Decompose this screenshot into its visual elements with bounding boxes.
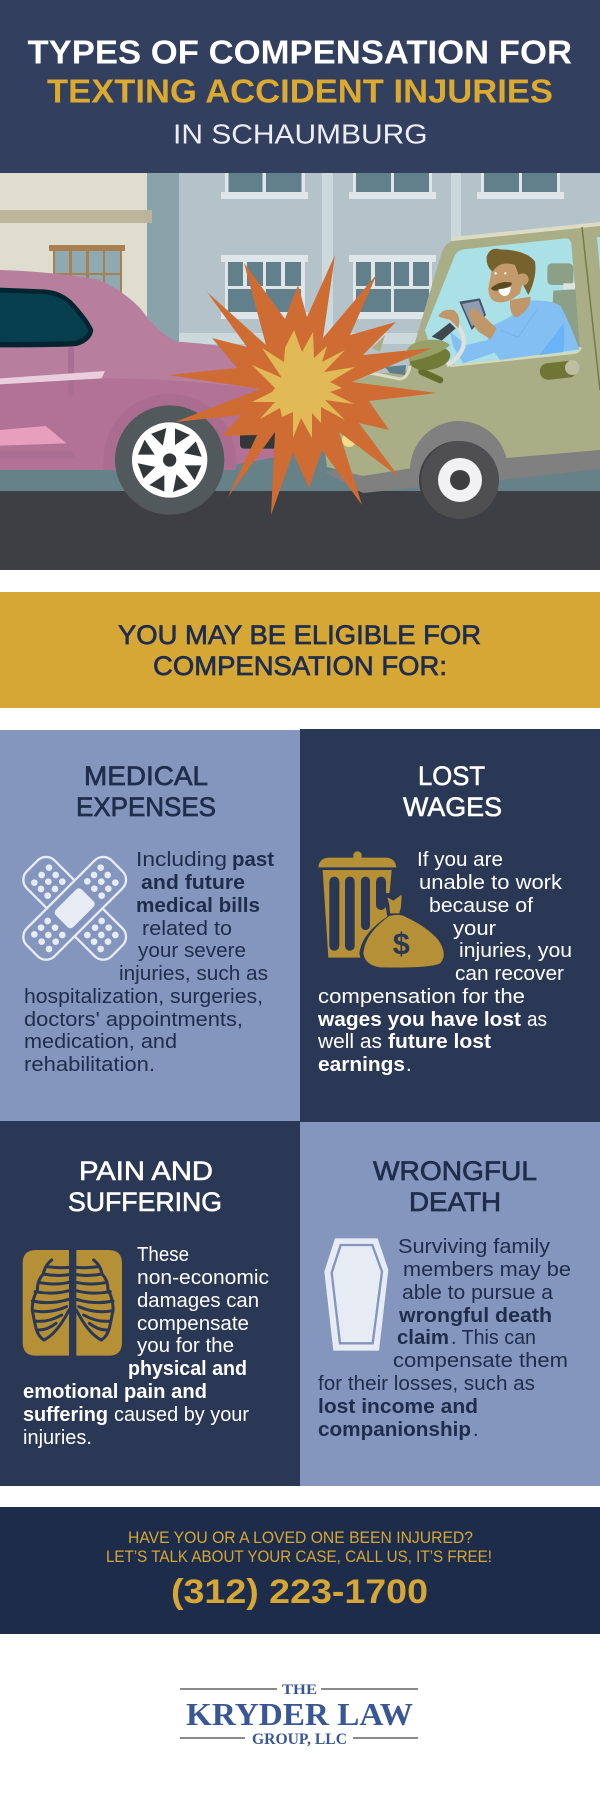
text: wrongful death body: Surviving family <box>398 1236 550 1258</box>
text: medical expenses body: Including <box>136 849 227 871</box>
icon: coffin <box>324 1238 388 1351</box>
text: lost wages body: future lost <box>388 1031 491 1053</box>
text: lost wages body: because of <box>429 895 533 917</box>
pink car <box>0 270 293 515</box>
text: medical expenses body: injuries, such as <box>119 963 268 985</box>
text: medical expenses body: medication, and <box>24 1031 177 1053</box>
heading: wrongful death <box>373 1156 537 1217</box>
text: medical expenses body: hospitalization, surgeries, <box>24 986 263 1008</box>
logo: The Kryder Law Group <box>180 1682 418 1748</box>
heading: lost wages: WAGES <box>403 792 502 822</box>
text: pain and suffering body: injuries. <box>23 1427 92 1449</box>
text: lost wages body: as <box>527 1009 547 1031</box>
icon: trash can and money bag <box>318 851 444 971</box>
heading: wrongful death: WRONGFUL <box>373 1156 537 1186</box>
logo: The Kryder Law Group: KRYDER LAW <box>186 1696 413 1732</box>
heading: pain and suffering: SUFFERING <box>68 1187 222 1217</box>
text: wrongful death body: wrongful death <box>398 1305 552 1327</box>
call to action text: HAVE YOU OR A LOVED ONE BEEN INJURED? <box>128 1529 473 1547</box>
icon: trash can and money bag: $ <box>393 927 410 961</box>
panel: lost wages <box>300 729 600 1122</box>
text: medical expenses body <box>24 849 274 1076</box>
logo: The Kryder Law Group: THE <box>282 1682 317 1698</box>
subtitle: IN SCHAUMBURG <box>173 119 428 150</box>
heading: medical expenses <box>76 761 216 822</box>
banner heading: YOU MAY BE ELIGIBLE FOR <box>118 620 481 650</box>
icon: rib cage <box>23 1250 122 1356</box>
text: medical expenses body: doctors' appointments, <box>24 1009 243 1031</box>
text: wrongful death body: members may be <box>403 1259 571 1281</box>
call to action text: LET’S TALK ABOUT YOUR CASE, CALL US, IT’S FREE! <box>106 1548 492 1566</box>
banner heading <box>118 620 481 681</box>
panel: pain and suffering <box>0 1121 300 1486</box>
text: lost wages body: injuries, you <box>459 940 572 962</box>
text: medical expenses body: and future <box>141 872 245 894</box>
text: medical expenses body: past <box>232 849 274 871</box>
text: lost wages body: wages you have lost <box>317 1009 521 1031</box>
heading: pain and suffering: PAIN AND <box>79 1156 213 1186</box>
text: pain and suffering body: suffering <box>23 1404 108 1426</box>
call to action text <box>106 1529 492 1566</box>
pink car wheel <box>115 405 224 515</box>
text: medical expenses body: medical bills <box>136 895 260 917</box>
icon: crossed bandages <box>18 852 131 965</box>
heading: medical expenses: EXPENSES <box>76 792 216 822</box>
text: pain and suffering body: emotional pain and <box>23 1381 207 1403</box>
text: lost wages body: If you are <box>417 849 503 871</box>
heading: lost wages: LOST <box>418 761 485 791</box>
text: wrongful death body: . <box>473 1419 479 1441</box>
van wheel <box>419 441 499 519</box>
title line 1: TYPES OF COMPENSATION FOR <box>28 33 572 70</box>
title line 2: TEXTING ACCIDENT INJURIES <box>47 73 553 110</box>
ground and road <box>0 440 600 570</box>
text: wrongful death body: lost income and <box>318 1396 478 1418</box>
heading: pain and suffering <box>68 1156 222 1217</box>
banner heading: COMPENSATION FOR: <box>153 651 447 681</box>
text: wrongful death body <box>318 1236 571 1441</box>
text: pain and suffering body: non-economic <box>137 1267 269 1289</box>
eligibility banner <box>0 592 600 708</box>
text: medical expenses body: your severe <box>138 940 246 962</box>
text: medical expenses body: rehabilitation. <box>24 1054 155 1076</box>
text: wrongful death body: able to pursue a <box>402 1282 554 1304</box>
heading: medical expenses: MEDICAL <box>84 761 208 791</box>
explosion burst <box>168 255 437 515</box>
phone number: (312) 223-1700 <box>171 1573 428 1611</box>
text: wrongful death body: . This can <box>451 1327 536 1349</box>
text: lost wages body <box>317 849 572 1076</box>
illustration: texting crash scene <box>0 173 600 570</box>
text: wrongful death body: compensate them <box>393 1350 568 1372</box>
text: lost wages body: can recover <box>455 963 564 985</box>
text: pain and suffering body: physical and <box>128 1358 247 1380</box>
text: pain and suffering body: you for the <box>137 1335 234 1357</box>
background buildings <box>0 173 600 473</box>
text: lost wages body: . <box>406 1054 412 1076</box>
text: lost wages body: earnings <box>318 1054 405 1076</box>
panel: wrongful death <box>300 1122 600 1486</box>
header banner <box>0 0 600 173</box>
logo: The Kryder Law Group: GROUP, LLC <box>252 1731 347 1748</box>
text: wrongful death body: for their losses, such as <box>318 1373 535 1395</box>
text: pain and suffering body: These <box>137 1244 189 1266</box>
text: pain and suffering body: damages can <box>137 1290 259 1312</box>
text: wrongful death body: companionship <box>318 1419 471 1441</box>
text: lost wages body: your <box>453 918 496 940</box>
heading: wrongful death: DEATH <box>409 1187 501 1217</box>
call to action footer <box>0 1507 600 1634</box>
text: pain and suffering body: caused by your <box>114 1404 249 1426</box>
text: medical expenses body: related to <box>142 918 232 940</box>
panel: medical expenses <box>0 730 300 1121</box>
driver in window <box>407 238 581 381</box>
text: pain and suffering body: compensate <box>137 1313 249 1335</box>
text: lost wages body: well as <box>317 1031 382 1053</box>
green van <box>322 224 600 519</box>
heading: lost wages <box>403 761 502 822</box>
text: lost wages body: unable to work <box>419 872 563 894</box>
text: lost wages body: compensation for the <box>318 986 525 1008</box>
text: pain and suffering body <box>23 1244 269 1449</box>
text: wrongful death body: claim <box>397 1327 449 1349</box>
